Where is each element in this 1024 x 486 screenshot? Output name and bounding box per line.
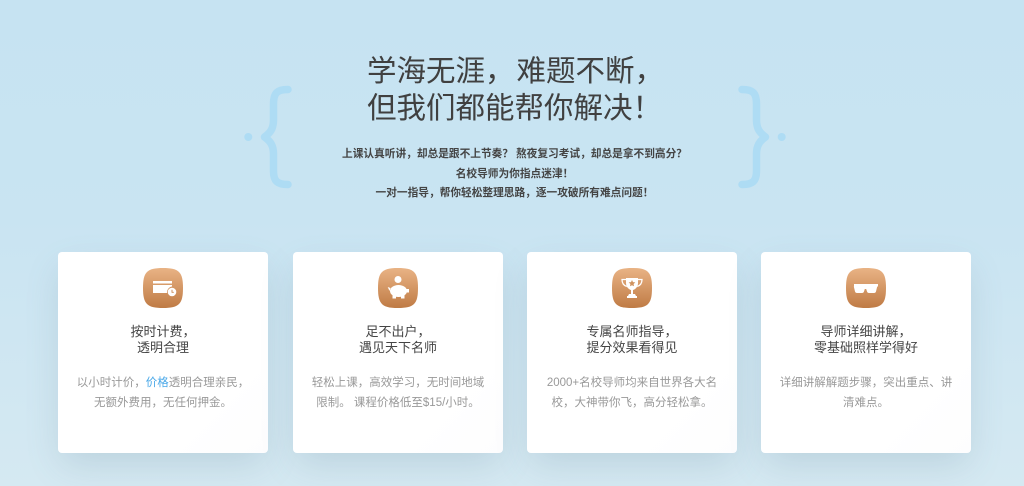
card heading: 提分效果看得见 <box>586 340 678 355</box>
card text <box>312 376 484 408</box>
card heading: 透明合理 <box>137 340 189 355</box>
card text: 校，大神带你飞，高分轻松拿。 <box>552 396 712 408</box>
card heading: 零基础照样学得好 <box>814 340 918 355</box>
card heading: 导师详细讲解， <box>820 324 912 339</box>
card text <box>780 376 952 408</box>
card text <box>547 376 717 408</box>
title <box>367 55 664 124</box>
card heading: 足不出户， <box>365 324 430 339</box>
card heading <box>130 324 196 355</box>
card text: 2000+名校导师均来自世界各大名 <box>547 376 717 388</box>
intro text: 一对一指导，帮你轻松整理思路，逐一攻破所有难点问题！ <box>376 187 653 199</box>
card heading: 遇见天下名师 <box>359 340 437 355</box>
title: 学海无涯，难题不断， <box>367 55 664 88</box>
intro text <box>342 147 687 199</box>
intro text: 上课认真听讲，却总是跟不上节奏？ 熬夜复习考试，却总是拿不到高分？ <box>342 148 687 160</box>
icon: trophy <box>612 268 652 308</box>
left brace decoration <box>244 86 292 188</box>
title: 但我们都能帮你解决！ <box>367 92 662 124</box>
panel: tutor guidance card <box>527 252 737 453</box>
card text: 无额外费用，无任何押金。 <box>94 396 232 408</box>
card heading <box>586 324 678 355</box>
card text: 限制。 课程价格低至$15/小时。 <box>316 396 480 408</box>
icon: piggy bank <box>378 268 418 308</box>
icon: glasses <box>846 268 886 308</box>
card text <box>77 376 249 408</box>
panel: remote learning card <box>293 252 503 453</box>
card heading <box>359 324 437 355</box>
card text: 详细讲解解题步骤，突出重点、讲 <box>780 376 952 388</box>
card text: 轻松上课，高效学习，无时间地域 <box>312 376 484 388</box>
card text: 以小时计价，价格透明合理亲民， <box>77 376 249 388</box>
card heading <box>814 324 918 355</box>
card heading: 按时计费， <box>130 324 196 339</box>
panel: detailed teaching card <box>761 252 971 453</box>
card text: 清难点。 <box>843 396 889 408</box>
panel: billing card <box>58 252 268 453</box>
icon: card with clock <box>143 268 183 308</box>
intro text: 名校导师为你指点迷津！ <box>456 168 573 180</box>
right brace decoration <box>738 86 786 188</box>
card heading: 专属名师指导， <box>586 324 678 339</box>
